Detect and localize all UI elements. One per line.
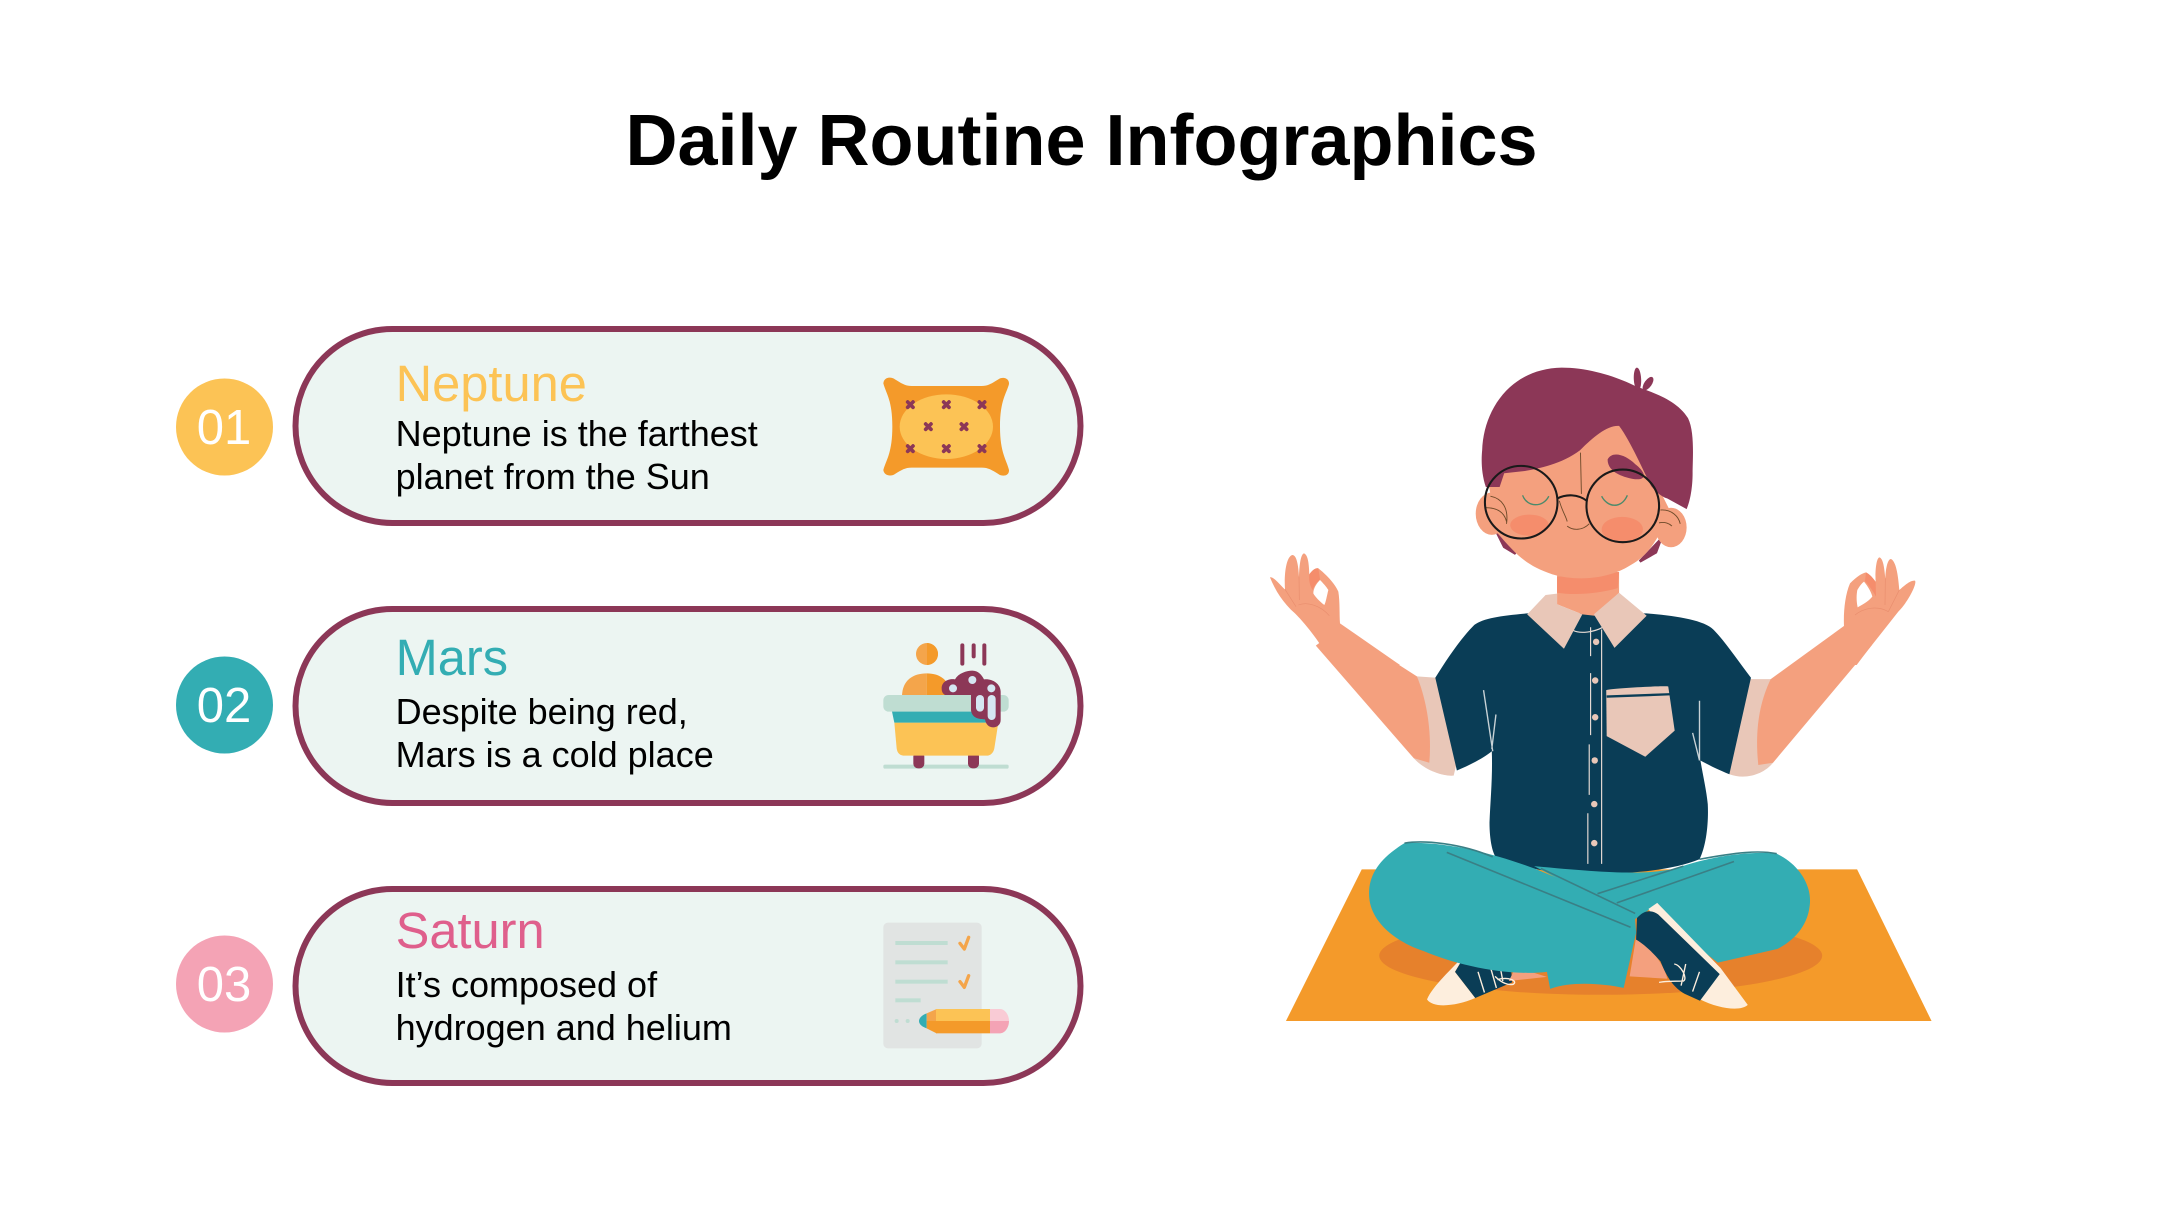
panel: step 02 Mars (176, 609, 1080, 803)
number badge 03 (176, 936, 273, 1032)
right shoe (1636, 903, 1748, 1009)
number badge 02: 02 (197, 679, 251, 733)
description Mars: Despite being red, (396, 691, 688, 732)
pants (1369, 842, 1810, 989)
closed eyes (1523, 495, 1627, 505)
panel: step 03 Saturn (176, 889, 1080, 1083)
glasses (1485, 466, 1659, 542)
number badge 02 (176, 656, 273, 754)
description Neptune: planet from the Sun (396, 456, 710, 497)
description Saturn: hydrogen and helium (396, 1007, 732, 1048)
number badge 03: 03 (197, 958, 251, 1012)
face (1486, 418, 1670, 578)
left arm (1316, 627, 1457, 776)
left shoe (1427, 953, 1547, 1005)
icon: checklist and pencil (883, 923, 1009, 1048)
heading Saturn: Saturn (396, 902, 545, 959)
description Neptune: Neptune is the farthest (396, 413, 758, 454)
left hand (1270, 553, 1400, 665)
pill card 02 (296, 609, 1080, 803)
shirt (1435, 613, 1751, 874)
right arm (1729, 626, 1872, 777)
icon: pillow (883, 378, 1009, 476)
number badge 01: 01 (197, 401, 251, 455)
description Mars: Mars is a cold place (396, 734, 714, 775)
pill card 03 (296, 889, 1080, 1083)
number badge 01 (176, 378, 273, 476)
description Saturn: It’s composed of (396, 964, 658, 1005)
yoga mat (1286, 869, 1932, 1021)
person figure (1316, 367, 1872, 1009)
heading Mars: Mars (396, 629, 508, 686)
collar (1527, 593, 1647, 649)
panel: step 01 Neptune (176, 329, 1080, 523)
heading Neptune: Neptune (396, 355, 587, 412)
title: Daily Routine Infographics (625, 101, 1538, 181)
mat shadow (1379, 917, 1822, 995)
nose and mouth lines (1486, 453, 1680, 529)
illustration: meditating person on mat (1270, 367, 1932, 1021)
foot (1630, 937, 1667, 979)
right hand (1820, 557, 1915, 665)
pill card 01 (296, 329, 1080, 523)
hair (1482, 367, 1693, 509)
ears (1476, 493, 1687, 547)
icon: bathtub (883, 643, 1009, 769)
neck (1557, 572, 1619, 616)
hair behind head (1495, 528, 1660, 561)
blush (1510, 515, 1643, 542)
